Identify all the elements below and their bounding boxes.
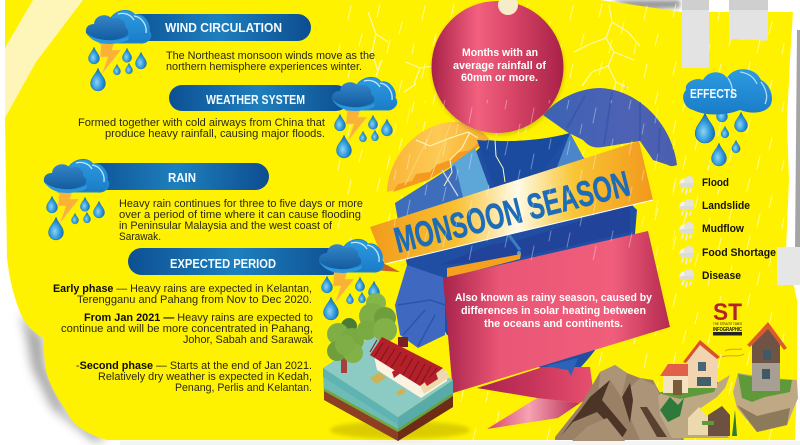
panel: wind circulation — [86, 10, 375, 91]
heading pill: weather system: WEATHER SYSTEM — [206, 92, 305, 107]
text: weather system: produce heavy rainfall, causing major floods. — [105, 128, 325, 140]
text: rain: Sarawak. — [119, 231, 161, 243]
text: rain — [119, 198, 363, 243]
effects list: Landslide — [702, 200, 750, 212]
umbrella: orange — [387, 122, 490, 192]
heading pill: expected period — [128, 248, 344, 275]
text: wind circulation — [166, 50, 375, 73]
effects list: Food Shortage — [702, 247, 776, 259]
right soil side — [398, 380, 453, 441]
text: rain: Heavy rain continues for three to five days or more — [119, 198, 363, 210]
callout: pin circle months — [432, 0, 564, 135]
text: wind circulation: northern hemisphere experiences winter. — [166, 61, 362, 73]
flooded ground surface — [323, 335, 453, 417]
illustration: flooded house — [323, 293, 470, 441]
effects list: Flood — [702, 177, 729, 189]
adhesive tape strips: top right — [682, 0, 768, 68]
right island — [733, 373, 798, 432]
ribbon fold — [477, 367, 594, 403]
logo: ST infographic: INFOGRAPHIC — [713, 327, 742, 333]
text: months with rainfall: 60mm or more. — [461, 72, 538, 84]
text: months with rainfall — [453, 47, 546, 84]
lightning bolts in background — [358, 5, 640, 98]
panel: rain — [44, 159, 363, 243]
text: months with rainfall: average rainfall of — [453, 60, 546, 72]
heading pill: expected period: EXPECTED PERIOD — [170, 256, 276, 271]
panel: weather system — [78, 77, 397, 158]
logo: ST infographic: THE STRAITS TIMES — [713, 322, 743, 326]
text: from Jan 2021: Johor, Sabah and Sarawak — [183, 334, 313, 346]
text: rain: over a period of time where it can cause flooding — [119, 209, 361, 221]
panel: umbrellas — [387, 86, 677, 378]
text: second phase — [76, 360, 312, 394]
text: from Jan 2021: continue and will be more concentrated in Pahang, — [61, 323, 313, 335]
main house tall wing — [688, 342, 717, 388]
umbrella: large blue centre — [395, 133, 637, 378]
icon: storm cloud — [44, 159, 109, 240]
ribbon main — [443, 231, 670, 393]
trees — [327, 293, 397, 373]
main house low wing — [663, 376, 688, 393]
tower house — [752, 363, 780, 391]
small lower house — [688, 407, 708, 435]
house — [370, 337, 450, 398]
text: rain: in Peninsular Malaysia and the west coast of — [119, 220, 333, 232]
panel: expected period — [53, 239, 384, 394]
text: second phase: Relatively dry weather is expected in Kedah, — [98, 371, 312, 383]
ribbon tail — [487, 398, 580, 429]
white rain over umbrellas and banner — [385, 100, 680, 260]
lightning over umbrellas — [416, 132, 505, 186]
text: weather system: Formed together with cold airways from China that — [78, 117, 325, 129]
heading pill: wind circulation: WIND CIRCULATION — [165, 20, 282, 35]
left soil side — [323, 368, 398, 441]
heading pill: rain: RAIN — [168, 170, 196, 185]
icon: pin — [498, 0, 518, 15]
text: second phase: Penang, Perlis and Kelantan. — [175, 382, 312, 394]
green trees — [660, 397, 684, 422]
icon: storm cloud — [332, 77, 397, 158]
heading pill: weather system — [169, 85, 349, 111]
left island — [658, 375, 730, 438]
heading pill: rain — [85, 163, 269, 190]
rain streak texture — [330, 0, 790, 440]
ribbon: definition — [443, 231, 670, 429]
panel: effects — [680, 69, 776, 287]
title banner — [370, 141, 653, 272]
icon: storm cloud — [319, 239, 384, 320]
icon: effects cloud — [683, 69, 772, 166]
illustration: landslide houses — [658, 322, 798, 438]
text: early phase: Early phase — Heavy rains are expected in Kelantan, — [53, 283, 312, 295]
umbrella: blue right — [543, 86, 677, 166]
adhesive tape: right — [777, 247, 800, 285]
text: definition: differences in solar heating between — [461, 305, 646, 317]
text: second phase: -Second phase — Starts at the end of Jan 2021. — [76, 360, 312, 372]
title: MONSOON SEASON — [390, 163, 634, 261]
logo: ST infographic: ST — [713, 299, 742, 326]
heading: effects: EFFECTS — [690, 86, 737, 101]
effects list: Mudflow — [702, 223, 745, 235]
text: weather system — [78, 117, 325, 140]
text: early phase — [53, 283, 312, 306]
effects list — [680, 176, 776, 287]
text: definition: Also known as rainy season, caused by — [455, 292, 653, 304]
text: from Jan 2021: From Jan 2021 — Heavy rains are expected to — [84, 312, 313, 324]
text: definition — [455, 292, 653, 330]
icon: storm cloud — [86, 10, 151, 91]
effects list: Disease — [702, 270, 741, 282]
text: from Jan 2021 — [61, 312, 313, 346]
text: wind circulation: The Northeast monsoon winds move as the — [166, 50, 375, 62]
illustration: rocky mountain — [555, 365, 684, 441]
heading pill: wind circulation — [125, 14, 311, 41]
adhesive tape: top left — [5, 0, 83, 118]
text: months with rainfall: Months with an — [462, 47, 538, 59]
text: early phase: Terengganu and Pahang from Nov to Dec 2020. — [77, 294, 312, 306]
text: definition: the oceans and continents. — [484, 318, 623, 330]
